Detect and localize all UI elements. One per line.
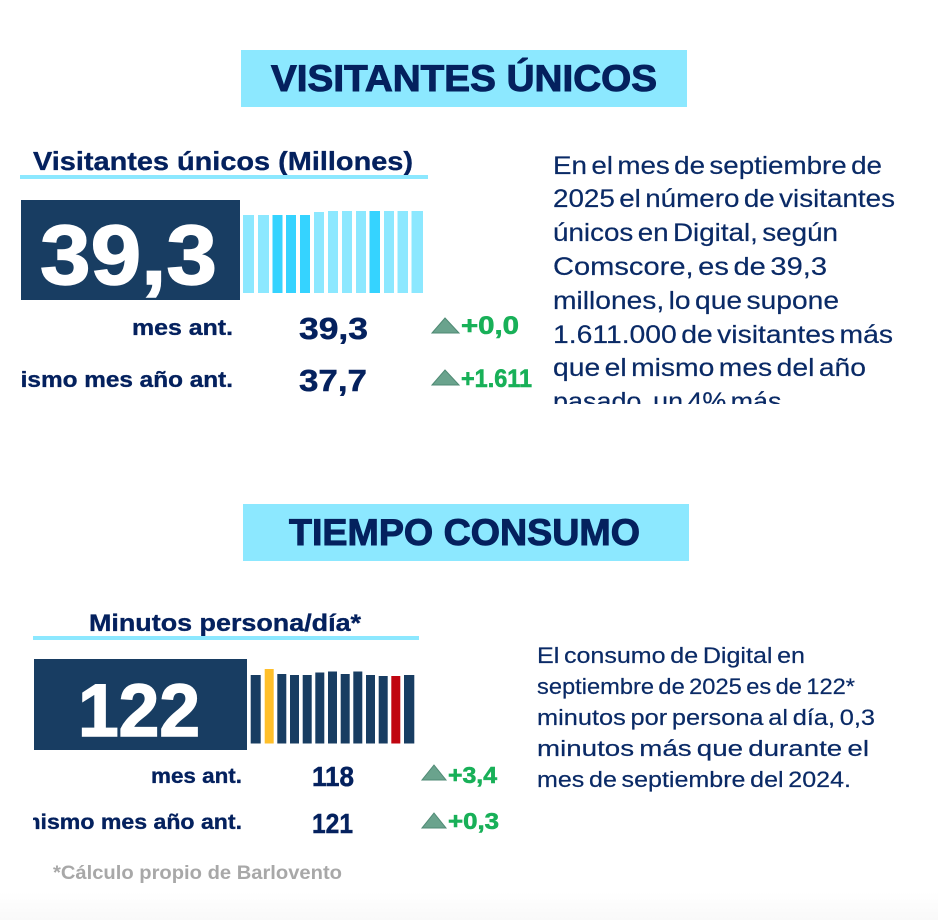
row: mismo mes año anterior (22, 369, 532, 396)
row: mismo mes año anterior: 121 (312, 808, 353, 839)
text block: consumo: minutos por persona al día, 0,3 (537, 705, 875, 730)
row: mismo mes año anterior: mismo mes año ant. (20, 811, 242, 834)
heading: tiempo consumo (243, 504, 689, 561)
bar chart: minutos mensuales (251, 669, 414, 744)
heading: tiempo consumo: TIEMPO CONSUMO (289, 512, 640, 553)
text block: visitantes: 2025 el número de visitantes (553, 185, 895, 213)
row: mismo mes año anterior: +0,3 (448, 808, 499, 834)
row: mes anterior (151, 761, 497, 792)
bar chart: visitantes mensuales (243, 211, 423, 293)
heading: visitantes únicos: VISITANTES ÚNICOS (271, 57, 657, 99)
text block: consumo (537, 643, 875, 792)
heading: visitantes únicos (241, 50, 687, 107)
row: mismo mes año anterior: +1.611 (461, 365, 532, 393)
text block: consumo: El consumo de Digital en (537, 643, 805, 668)
big number: 122 (34, 659, 247, 752)
subheading: visitantes únicos millones: Visitantes únicos (Millones) (33, 146, 413, 176)
text block: visitantes: únicos en Digital, según (553, 219, 838, 247)
panel: tiempo consumo (20, 504, 875, 884)
row: mes anterior: mes ant. (151, 765, 242, 788)
row: mes anterior: 39,3 (299, 311, 368, 346)
row: mes anterior: +0,0 (461, 312, 519, 340)
icon: triangle up (422, 813, 446, 828)
row: mes anterior: mes ant. (132, 315, 233, 340)
text block: visitantes: millones, lo que supone (553, 287, 839, 315)
big number: 39,3 (21, 200, 240, 302)
text block: consumo: mes de septiembre del 2024. (537, 767, 851, 792)
row: mismo mes año anterior: 37,7 (299, 363, 367, 398)
big number: 122: 122 (78, 669, 200, 752)
icon: triangle up (422, 765, 446, 780)
subheading: minutos persona día: Minutos persona/día* (89, 610, 362, 637)
row: mismo mes año anterior: mismo mes año ant. (0, 367, 233, 392)
text block: visitantes: pasado, un 4% más. (553, 388, 789, 416)
text block: visitantes (553, 152, 895, 416)
text block: consumo: septiembre de 2025 es de 122* (537, 674, 855, 699)
row: mes anterior: 118 (312, 761, 354, 792)
icon: triangle up (432, 318, 459, 333)
text block: visitantes: En el mes de septiembre de (553, 152, 882, 180)
row: mismo mes año anterior (33, 812, 498, 834)
text block: visitantes: que el mismo mes del año (553, 354, 866, 382)
big number: 39,3: 39,3 (40, 208, 217, 302)
row: mes anterior: +3,4 (448, 762, 497, 788)
text block: consumo: minutos más que durante el (537, 736, 869, 761)
row: mes anterior (132, 311, 519, 346)
panel: visitantes únicos (0, 50, 895, 416)
text block: visitantes: 1.611.000 de visitantes más (553, 321, 893, 349)
subheading: minutos persona día (33, 610, 419, 640)
icon: triangle up (432, 370, 459, 385)
text block: visitantes: Comscore, es de 39,3 (553, 253, 827, 281)
footnote: *Cálculo propio de Barlovento (53, 863, 342, 884)
